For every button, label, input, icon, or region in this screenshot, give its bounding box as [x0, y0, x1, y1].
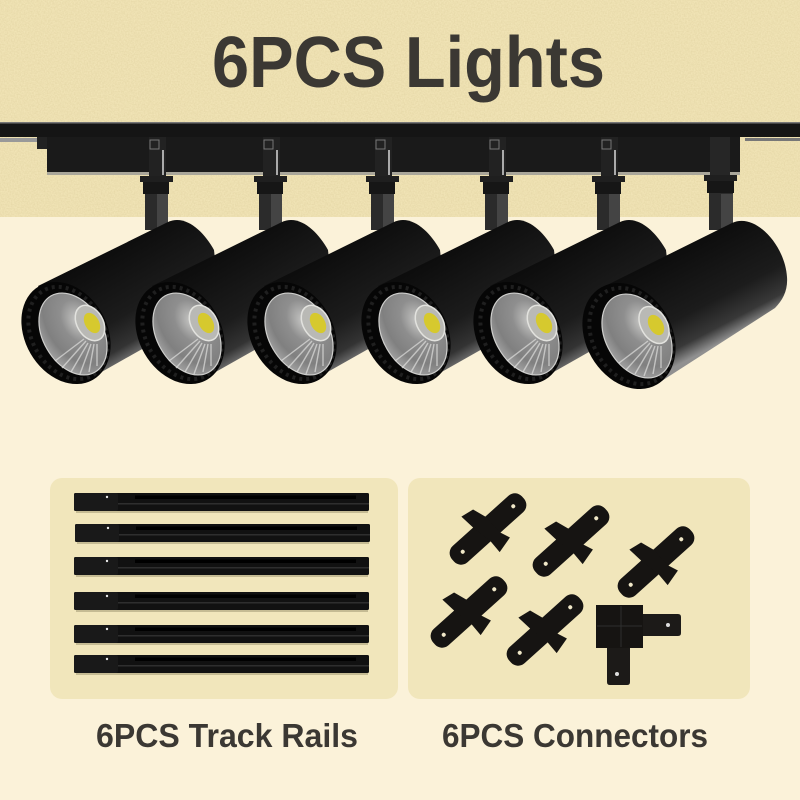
rail 6	[74, 655, 369, 675]
light 2	[117, 137, 334, 400]
light 3	[229, 137, 446, 400]
title: 6PCS Lights	[212, 23, 605, 103]
light 1	[3, 137, 220, 400]
track rail with mounted lights	[0, 122, 800, 406]
panel: connectors	[408, 477, 750, 699]
light 6	[564, 137, 787, 406]
rail 3	[74, 557, 369, 577]
light 4	[343, 137, 560, 400]
rail 5	[74, 625, 369, 645]
connector 2	[518, 489, 623, 591]
ceiling track	[0, 122, 800, 175]
panel: track rails	[50, 478, 398, 699]
L connector	[596, 605, 681, 685]
label: track rails: 6PCS Track Rails	[96, 717, 358, 754]
connector 4	[416, 560, 521, 662]
label: connectors: 6PCS Connectors	[442, 717, 708, 754]
connector 3	[603, 510, 708, 612]
light 5	[455, 137, 672, 400]
rail 1	[74, 493, 369, 513]
connector 5	[492, 578, 597, 680]
rail 2	[75, 524, 370, 544]
connector 1	[435, 477, 540, 579]
rail 4	[74, 592, 369, 612]
